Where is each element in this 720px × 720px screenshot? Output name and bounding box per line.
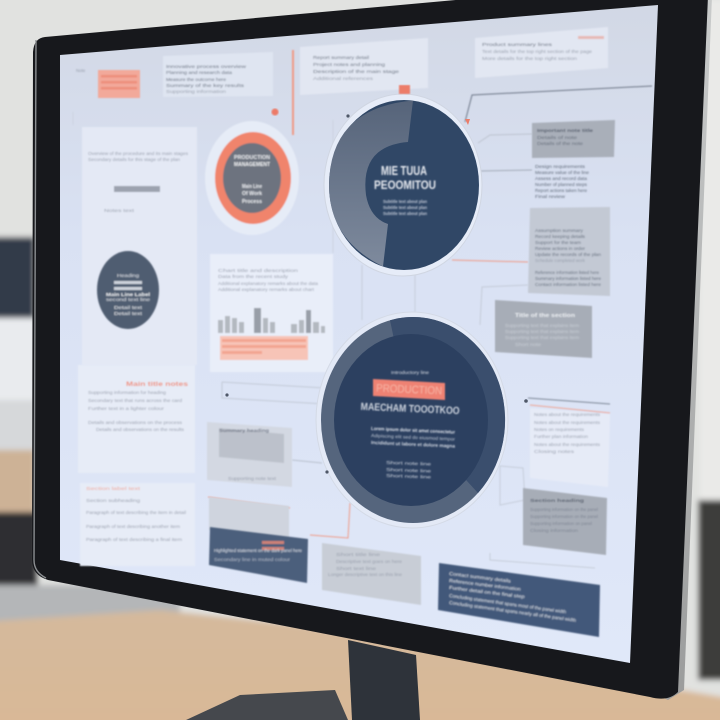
panel: bar chart card: Additional explanatory remarks about chart xyxy=(218,287,315,292)
panel: left lower card: Section label text xyxy=(86,486,141,491)
donut: lower main circle xyxy=(316,312,508,528)
donut: small orange circle: Of Work xyxy=(242,191,262,197)
circle title: PEOOMITOU xyxy=(374,178,436,192)
monitor stand xyxy=(186,640,420,720)
panel: right top grey card: Details of the note xyxy=(537,141,584,146)
red note under chart xyxy=(220,336,308,360)
panel: left lower card: Paragraph of text describing a final item xyxy=(86,537,182,542)
lower circle text xyxy=(360,370,460,480)
panel: bar chart card: Additional explanatory remarks about the data xyxy=(218,281,319,286)
header: text block left: Innovative process overview xyxy=(166,64,247,69)
donut: small dark circle: second text line xyxy=(106,297,151,302)
panel: right tall grey card: Reference information listed here xyxy=(535,270,599,275)
header: red tag: Note xyxy=(76,68,86,73)
panel: dark blue label box: Secondary line in muted colour xyxy=(214,557,291,562)
panel: left lower card: Paragraph of text describing another item xyxy=(86,524,180,529)
panel: left middle card: Secondary text that runs across the card xyxy=(88,398,183,403)
lower circle text: Introductory line xyxy=(391,370,430,375)
panel: left middle card: Supporting information for heading xyxy=(88,390,167,395)
panel: right lower grey card xyxy=(523,488,607,555)
panel: left lower card xyxy=(80,483,195,566)
circle title: Subtitle text about plan xyxy=(383,211,427,216)
header: text block left: Supporting information xyxy=(166,89,227,94)
header: text block right: Text details for the top right section of the page xyxy=(482,49,593,54)
lower circle text: Short note line xyxy=(386,467,432,474)
panel: large left card xyxy=(82,127,197,365)
panel: right white note card: Notes about the requirements xyxy=(534,420,601,425)
panel: right tall grey card: Summary information listed here xyxy=(535,276,601,281)
text block: right upper list: Final review xyxy=(535,194,566,199)
header: text block right xyxy=(475,27,608,78)
donut: small orange circle: PRODUCTION xyxy=(234,155,270,161)
lower circle text: Short note line xyxy=(386,460,432,467)
panel: left middle card: Further text in a lighter colour xyxy=(88,406,165,411)
header: text block left: Planning and research data xyxy=(166,70,233,75)
donut: small dark circle: Detail text xyxy=(114,305,143,310)
panel: blue bottom right box: Concluding statement that spans most of the panel width xyxy=(449,593,567,614)
icon: small dark markers xyxy=(225,114,528,474)
panel: bar chart card: Data from the recent study xyxy=(218,274,289,279)
header: text block left: Summary of the key results xyxy=(166,83,245,88)
header: text block right: Product summary lines xyxy=(482,42,553,47)
connector lines xyxy=(73,50,652,568)
donut: small orange circle: Process xyxy=(242,199,262,205)
panel: right tall grey card: Support for the team xyxy=(535,240,581,245)
panel: grey centre bottom box: Descriptive text goes on here xyxy=(336,559,403,564)
panel: grey centre bottom box: Longer descriptive text on this line xyxy=(328,572,403,577)
crescent segment xyxy=(329,100,413,266)
panel: right mid grey card: Supporting text that explains item xyxy=(505,335,579,340)
panel: left middle card: Main title notes xyxy=(126,382,189,388)
circle title: Subtitle text about plan xyxy=(383,199,427,204)
header: red tag xyxy=(76,68,140,98)
panel: left middle card: Details and observations on the process xyxy=(88,420,183,425)
panel: left middle card: Details and observations on the results xyxy=(96,427,185,432)
lower circle text: Incididunt ut labore et dolore magna xyxy=(371,440,455,450)
panel: bar chart card: Chart title and description xyxy=(218,268,299,273)
panel: right lower grey card: Closing information xyxy=(530,528,579,533)
donut: small orange circle: Main Line xyxy=(242,184,262,190)
panel: blue bottom right box: Concluding statement that spans nearly all of the panel width xyxy=(449,600,577,623)
panel: left lower card: Section subheading xyxy=(86,498,141,503)
icon: orange marker dot xyxy=(272,108,278,116)
panel: right mid grey card: Short note xyxy=(515,342,542,347)
panel: grey note card xyxy=(207,422,292,487)
text block: right upper list: Assess and record data xyxy=(535,176,587,181)
text block: right upper list: Report actions taken here xyxy=(535,188,587,193)
panel: right tall grey card: Update the records of the plan xyxy=(535,252,601,257)
panel: blue bottom right box: Contact summary details xyxy=(449,571,512,584)
donut: small dark circle xyxy=(97,251,159,329)
text block: right upper list: Design requirements xyxy=(535,164,586,169)
header: text block centre: Description of the main stage xyxy=(313,69,400,74)
screen xyxy=(60,5,658,663)
red title banner: PRODUCTION xyxy=(376,383,442,397)
panel: right white note card: Closing notes xyxy=(534,449,575,454)
panel: blue bottom right box: Further detail on the final step xyxy=(449,585,525,599)
panel: right tall grey card: Review actions in order xyxy=(535,246,585,251)
panel: large left card: Notes text xyxy=(104,208,135,213)
panel: grey note card: Supporting note text xyxy=(228,476,277,481)
donut: small dark circle: Detail text xyxy=(114,311,143,316)
donut: small orange circle xyxy=(205,121,299,235)
header: text block left: Measure the outcome here xyxy=(166,77,226,82)
panel: blue bottom right box xyxy=(438,563,600,637)
panel: right top grey card: Details of note xyxy=(537,135,578,140)
donut: small orange circle: MANAGEMENT xyxy=(234,162,270,168)
panel: right lower grey card: Supporting information on the panel xyxy=(530,514,598,519)
header: text block centre: Additional references xyxy=(313,76,374,81)
panel: right mid grey card: Supporting text that explains item xyxy=(505,329,579,334)
donut: small dark circle: Heading xyxy=(117,273,140,278)
panel: grey centre bottom box xyxy=(322,543,421,605)
text block: right upper list: Number of planned steps xyxy=(535,182,588,187)
panel: large left card: Secondary details for this stage of the plan xyxy=(88,157,181,162)
bar chart xyxy=(218,308,325,333)
panel: left middle card xyxy=(78,365,195,473)
panel: right top grey card: Important note title xyxy=(537,128,594,133)
panel: right white note card: Further plan information xyxy=(534,434,589,439)
panel: right tall grey card: Record keeping details xyxy=(535,234,586,239)
donut: small dark circle: Main Line Label xyxy=(106,292,150,297)
header: text block right: More details for the top right section xyxy=(482,56,578,61)
panel: right lower grey card: Supporting information on the panel xyxy=(530,507,598,512)
panel: blue bottom right box: Reference number information xyxy=(449,578,521,592)
panel: right mid grey card: Title of the section xyxy=(515,313,575,319)
panel: right white note card: Notes about the requirements xyxy=(534,412,601,417)
panel: right mid grey card xyxy=(495,300,592,358)
lower circle text: Adipiscing elit sed do eiusmod tempor xyxy=(371,433,456,442)
panel: dark blue label box xyxy=(209,527,308,583)
icon: orange marker on upper circle xyxy=(399,85,410,94)
text block: right upper list: Measure value of the line xyxy=(535,170,589,175)
panel: right top grey card xyxy=(532,120,615,158)
panel: dark blue label box: Highlighted statement on the dark panel here xyxy=(214,548,302,553)
panel: right white note card xyxy=(530,405,610,487)
panel: left lower card: Paragraph of text describing the item in detail xyxy=(86,510,186,515)
circle title: Subtitle text about plan xyxy=(383,205,427,210)
panel: large left card: Overview of the procedure and its main stages xyxy=(88,151,189,156)
text block: right upper list xyxy=(535,164,589,199)
header: text block centre xyxy=(300,38,428,95)
circle title xyxy=(374,163,436,216)
header: text block centre: Report summary detail xyxy=(313,55,369,60)
panel: bar chart card xyxy=(210,254,333,372)
panel: grey centre bottom box: Short text line xyxy=(336,566,377,571)
header: text block left xyxy=(163,52,273,97)
panel: right tall grey card xyxy=(528,207,610,296)
panel: grey note card: Summary heading xyxy=(219,428,269,433)
panel: right tall grey card: Assumption summary xyxy=(535,228,584,233)
panel: right lower grey card: Supporting information on panel xyxy=(530,521,592,526)
panel: right white note card: Notes on requirements xyxy=(534,427,585,432)
icon: orange arrowhead xyxy=(465,119,470,125)
lower circle text: MAECHAM TOOOTKOO xyxy=(360,401,460,417)
header: text block centre: Project notes and planning xyxy=(313,62,386,67)
lower circle text: Lorem ipsum dolor sit amet consectetur xyxy=(371,426,455,436)
panel: right mid grey card: Supporting text that explains item xyxy=(505,323,579,328)
panel: right tall grey card: Schedule completed work xyxy=(535,258,586,263)
lower circle text: Short note line xyxy=(386,473,432,480)
panel: grey centre bottom box: Short title line xyxy=(336,552,381,557)
panel: right white note card: Notes about the requirements xyxy=(534,442,601,447)
panel: right tall grey card: Contact information listed here xyxy=(535,282,601,287)
panel: grey box above dark label xyxy=(209,497,289,540)
donut: upper main circle xyxy=(324,94,482,276)
panel: right lower grey card: Section heading xyxy=(530,498,584,504)
circle title: MIE TUUA xyxy=(381,163,427,178)
